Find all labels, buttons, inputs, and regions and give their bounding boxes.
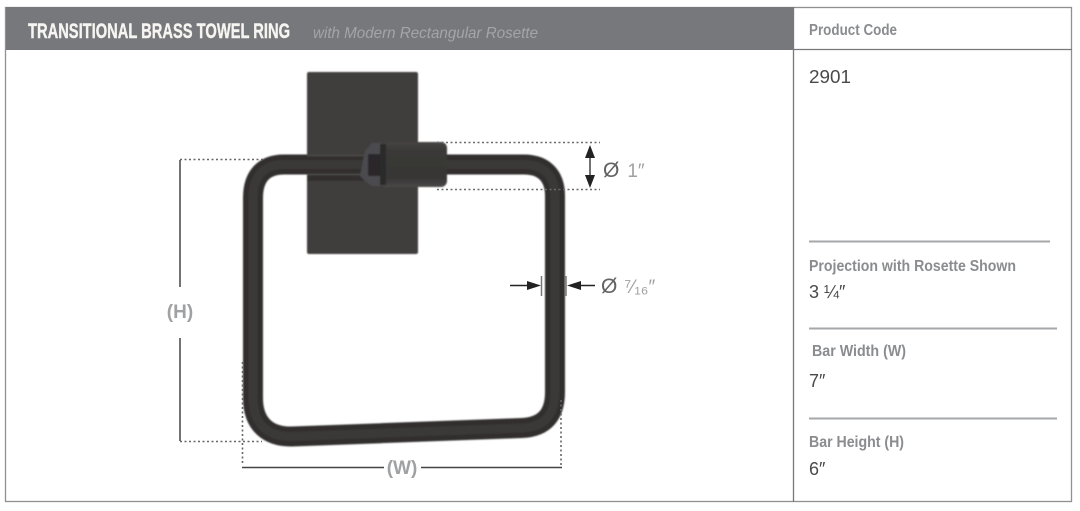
ring highlights [253, 164, 555, 437]
dimension: post diameter [437, 142, 645, 190]
label: bar height: Bar Height (H) [809, 434, 904, 451]
bar height spec [809, 418, 1057, 479]
value: bar width: 7″ [809, 371, 826, 391]
ring bar [253, 164, 555, 437]
bar width spec [809, 328, 1057, 391]
label: post diameter: Ø 1″ [603, 159, 645, 182]
shadow under bar on rosette [307, 175, 377, 181]
rosette plate [307, 72, 418, 254]
label: bar diameter: Ø ⁷⁄₁₆″ [601, 275, 655, 298]
projection spec [809, 242, 1050, 302]
dimension: bar diameter [510, 275, 655, 298]
label: projection: Projection with Rosette Shown [809, 258, 1016, 275]
value: bar height: 6″ [809, 459, 826, 479]
value: product code: 2901 [809, 67, 851, 87]
towel ring product illustration [253, 72, 555, 437]
header bar [6, 7, 793, 50]
mounting post [380, 142, 447, 187]
label: product code: Product Code [809, 22, 897, 39]
label: W: (W) [387, 458, 417, 479]
subtitle: with Modern Rectangular Rosette [313, 25, 538, 42]
title: TRANSITIONAL BRASS TOWEL RING [28, 20, 290, 43]
label: H: (H) [167, 302, 193, 323]
value: projection: 3 ¼″ [809, 282, 846, 302]
product code block [809, 22, 897, 87]
collar [360, 143, 384, 186]
label: bar width: Bar Width (W) [812, 343, 906, 360]
